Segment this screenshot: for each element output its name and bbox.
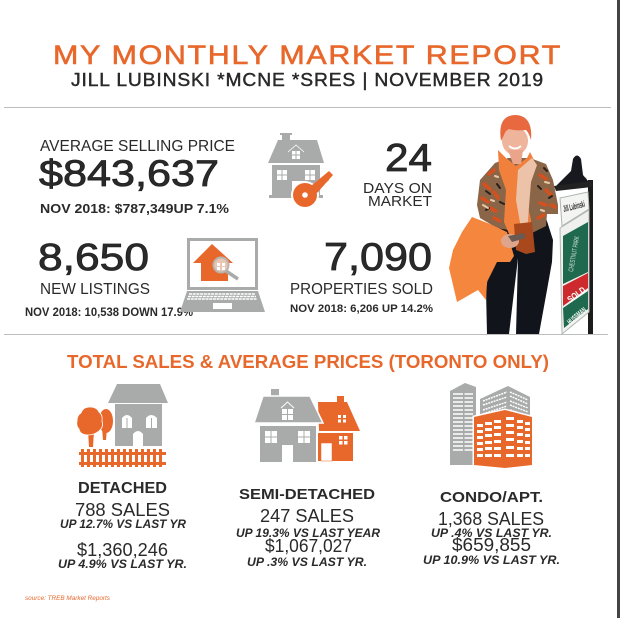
text: semi-detached stats: SEMI-DETACHED bbox=[239, 486, 375, 503]
stat: properties sold: PROPERTIES SOLD bbox=[290, 281, 433, 298]
trousers bbox=[486, 218, 553, 334]
photo: agent with sold sign: HUSSMAN bbox=[566, 305, 588, 327]
text: condo stats: CONDO/APT. bbox=[440, 489, 543, 506]
section heading: TOTAL SALES & AVERAGE PRICES (TORONTO ONLY) bbox=[67, 351, 549, 372]
floral jacket bbox=[477, 158, 558, 234]
icon: house with key bbox=[268, 133, 333, 209]
photo: agent with sold sign: CHESTNUT PARK bbox=[568, 235, 581, 272]
text: condo stats: 1,368 SALES bbox=[438, 509, 544, 529]
orange coat bbox=[449, 217, 514, 302]
stat: new listings: NEW LISTINGS bbox=[40, 281, 150, 298]
icon: condo towers bbox=[450, 383, 532, 468]
stat: days on market: 24 bbox=[385, 137, 432, 180]
text: condo stats bbox=[423, 489, 560, 567]
stat: new listings: 8,650 bbox=[38, 237, 149, 279]
text: detached stats: DETACHED bbox=[78, 480, 167, 497]
right hand bbox=[578, 177, 587, 185]
sign post bbox=[588, 180, 593, 334]
face bbox=[502, 127, 528, 155]
stat: new listings bbox=[25, 237, 193, 319]
subtitle: JILL LUBINSKI *MCNE *SRES | NOVEMBER 2019 bbox=[71, 70, 544, 90]
stat: average selling price bbox=[39, 138, 235, 216]
text: condo stats: UP .4% VS LAST YR. bbox=[431, 526, 552, 540]
stat: days on market: MARKET bbox=[368, 194, 432, 210]
text: detached stats: $1,360,246 bbox=[77, 540, 168, 560]
photo: agent with sold sign: Jill Lubinski bbox=[562, 199, 586, 214]
stat: average selling price: AVERAGE SELLING PRICE bbox=[40, 138, 235, 155]
photo: agent with sold sign bbox=[449, 115, 593, 334]
hair bbox=[500, 115, 531, 141]
text: detached stats bbox=[58, 480, 187, 571]
text: condo stats: UP 10.9% VS LAST YR. bbox=[423, 553, 560, 567]
text: semi-detached stats bbox=[236, 486, 380, 569]
stat: average selling price: $843,637 bbox=[39, 153, 219, 194]
stat: new listings: NOV 2018: 10,538 DOWN 17.9% bbox=[25, 307, 193, 319]
text: detached stats: UP 12.7% VS LAST YR bbox=[60, 517, 186, 531]
hand and phone bbox=[501, 234, 519, 248]
title: MY MONTHLY MARKET REPORT bbox=[53, 40, 562, 70]
scarf bbox=[498, 150, 534, 248]
stat: days on market: DAYS ON bbox=[363, 181, 432, 197]
stat: properties sold: NOV 2018: 6,206 UP 14.2% bbox=[290, 303, 433, 315]
sign board bbox=[560, 210, 589, 334]
text: semi-detached stats: $1,067,027 bbox=[265, 536, 352, 556]
photo: agent with sold sign: SOLD bbox=[565, 285, 588, 305]
lantern finial bbox=[556, 156, 588, 186]
text: condo stats: $659,855 bbox=[452, 535, 531, 555]
sign rider bbox=[560, 192, 589, 226]
icon: semi-detached houses bbox=[254, 389, 360, 462]
icon: detached house bbox=[77, 384, 168, 467]
source note: source: TREB Market Reports bbox=[25, 596, 110, 602]
icon: laptop with house search bbox=[180, 240, 265, 312]
text: detached stats: UP 4.9% VS LAST YR. bbox=[58, 557, 187, 571]
stat: properties sold bbox=[290, 236, 433, 315]
text: semi-detached stats: UP 19.3% VS LAST YEAR bbox=[236, 526, 380, 540]
stat: properties sold: 7,090 bbox=[324, 236, 432, 279]
text: semi-detached stats: UP .3% VS LAST YR. bbox=[247, 555, 367, 569]
text: semi-detached stats: 247 SALES bbox=[260, 506, 354, 526]
stat: days on market bbox=[363, 137, 432, 210]
text: detached stats: 788 SALES bbox=[75, 500, 170, 520]
stat: average selling price: NOV 2018: $787,349UP 7.1% bbox=[40, 201, 229, 216]
